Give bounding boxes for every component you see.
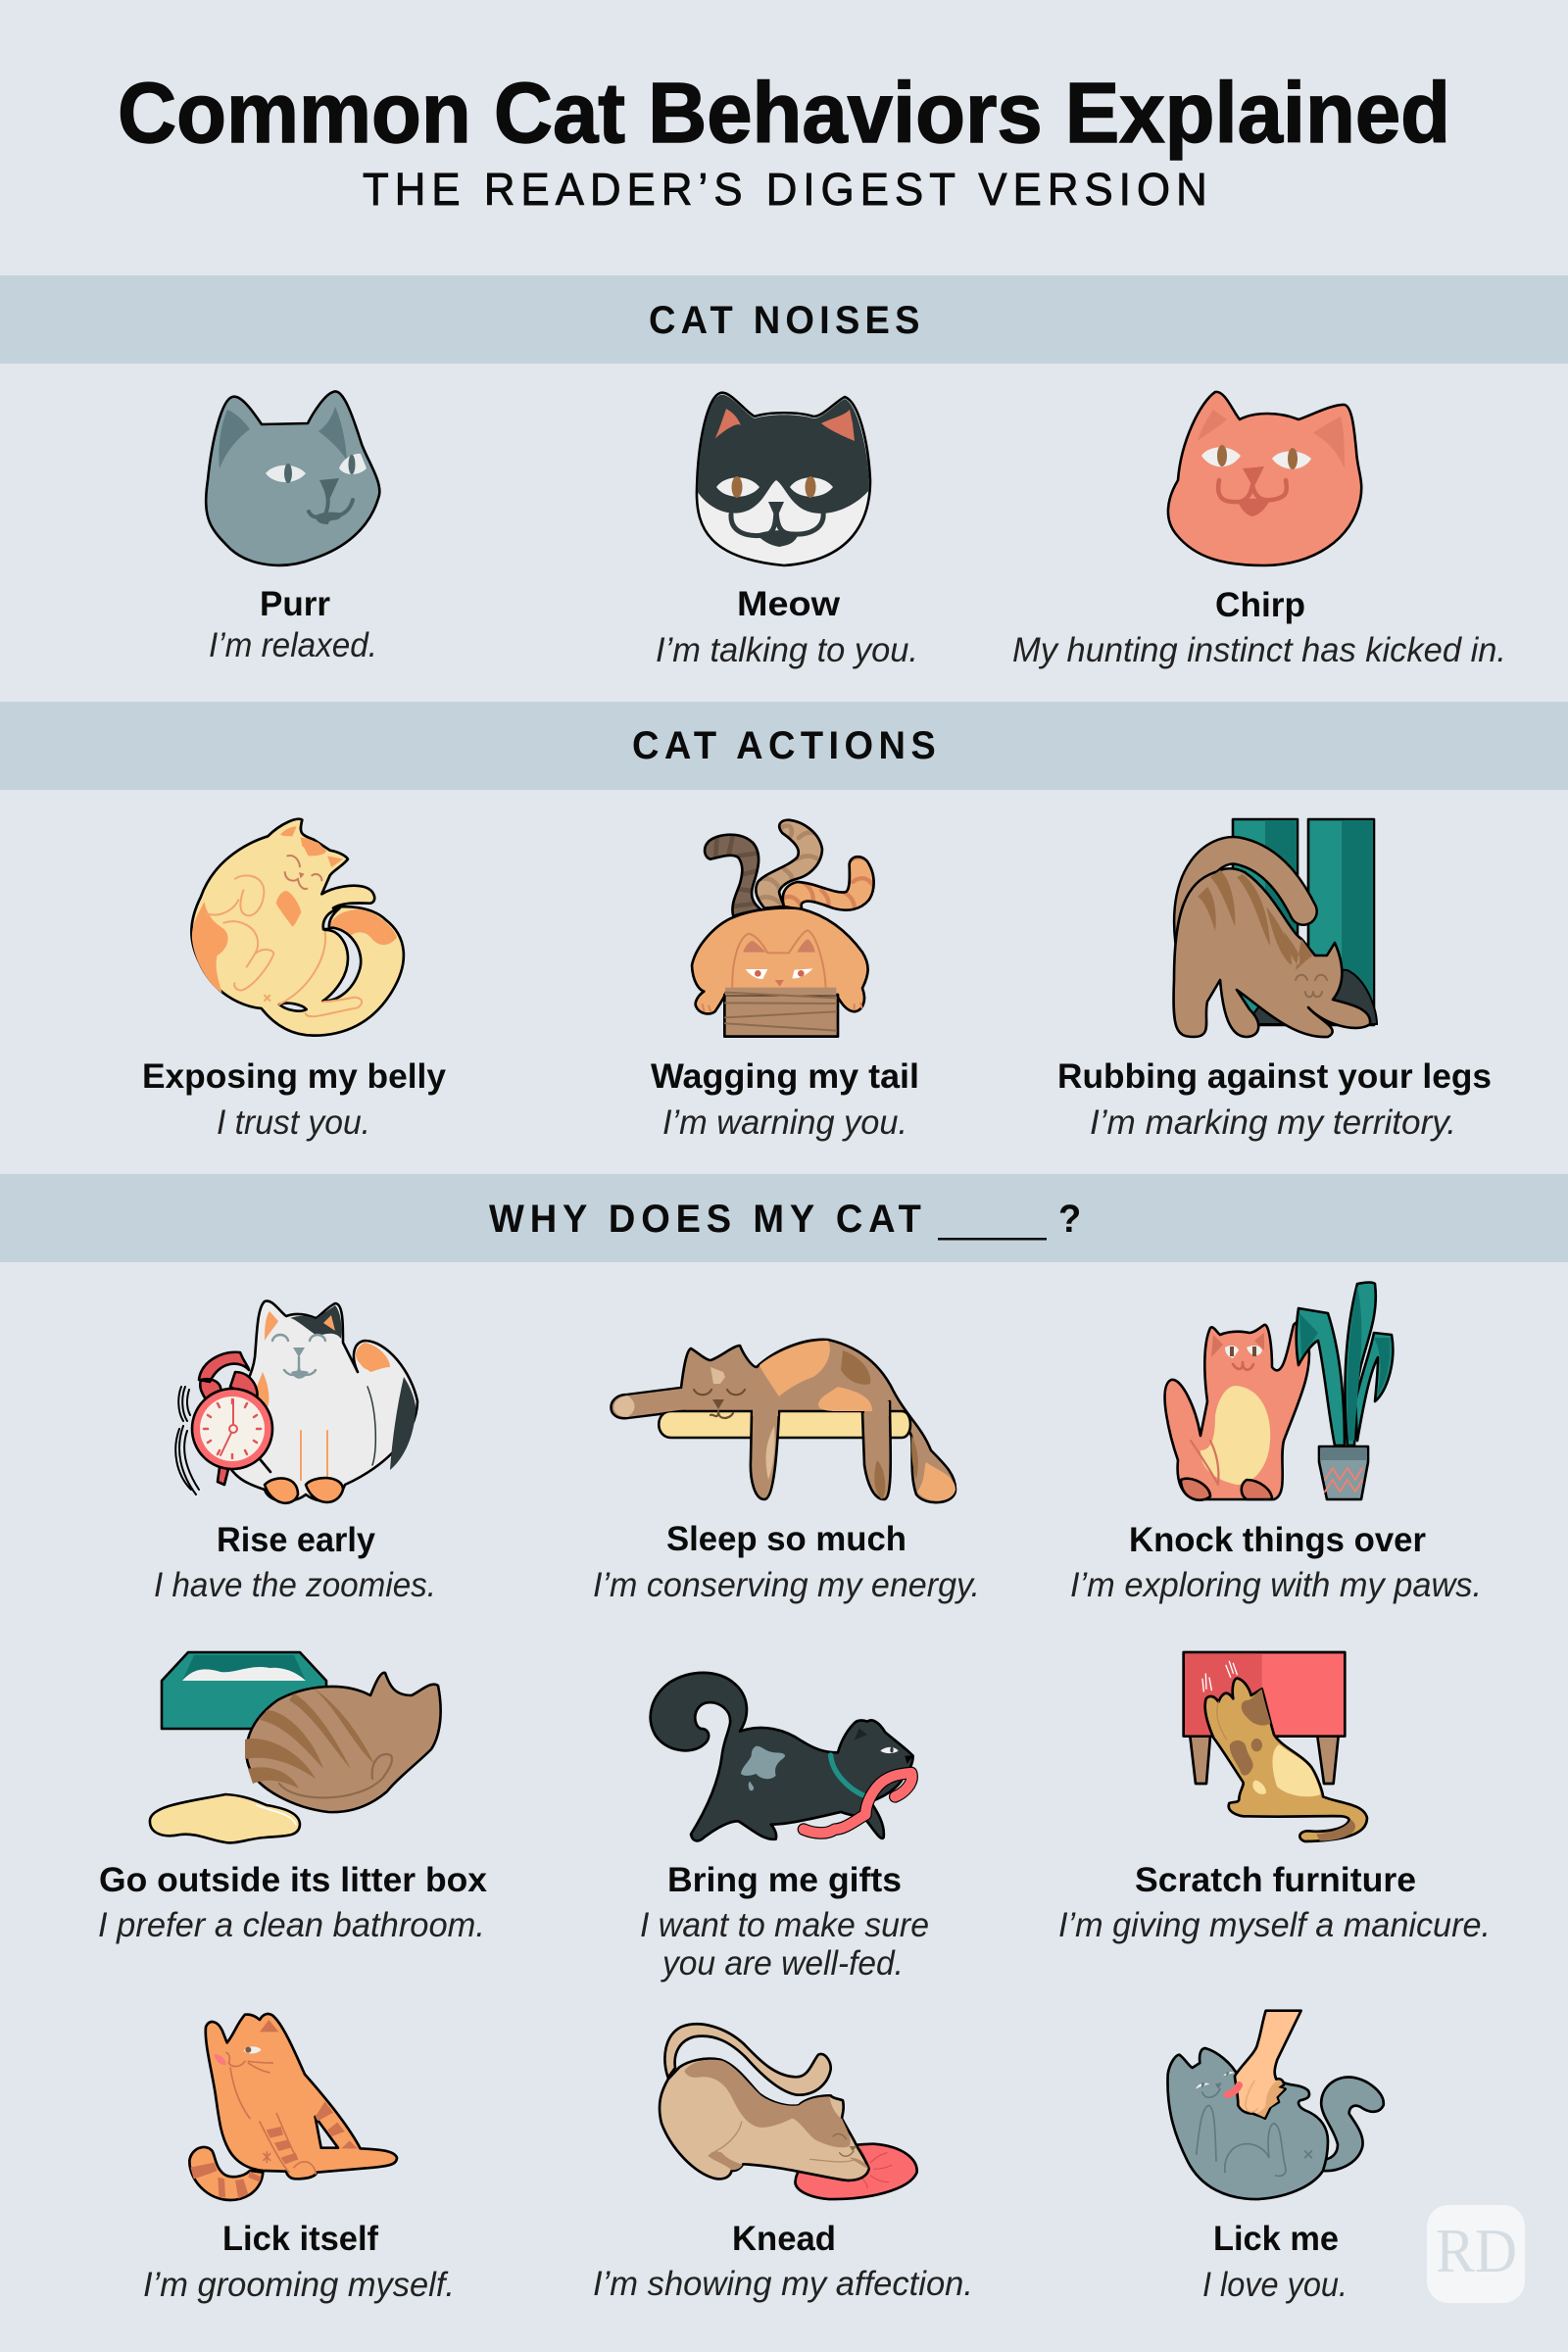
caption: I’m warning you. [662, 1103, 907, 1142]
item: wagging tail [651, 820, 919, 1142]
icon: cat sleeping on a log [612, 1340, 956, 1502]
icon: gray cat licking a hand [1167, 2011, 1384, 2199]
item: exposing belly [142, 819, 447, 1142]
icon: orange cat licking paw [189, 2014, 397, 2200]
logo: RD watermark: RD [1436, 2216, 1517, 2285]
item: scratch furniture [1058, 1652, 1491, 1944]
item: knock things over [1070, 1282, 1482, 1604]
section band: why does my cat: ? [1058, 1198, 1081, 1241]
label: Go outside its litter box [99, 1861, 488, 1899]
label: Bring me gifts [667, 1861, 902, 1899]
label: Purr [260, 585, 330, 623]
logo: RD watermark [1427, 2205, 1525, 2303]
label: Rise early [217, 1521, 376, 1559]
icon: coral cat face [1168, 392, 1361, 565]
item: meow [656, 393, 918, 669]
icon: cat kneading a red cushion [660, 2024, 917, 2199]
item: rise early [154, 1301, 436, 1604]
icon: cat rubbing two teal legs [1174, 819, 1377, 1037]
icon: litter box, cat and puddle [150, 1652, 441, 1842]
item: knead [593, 2024, 973, 2303]
icon: cat scratching a red table [1184, 1652, 1367, 1841]
heading: cat noises: CAT NOISES [649, 299, 919, 342]
icon: black cat carrying a toy [651, 1673, 913, 1840]
icon: cat and potted plant [1165, 1282, 1393, 1500]
section band: why does my cat [0, 1174, 1568, 1262]
caption: you are well-fed. [661, 1944, 904, 1983]
caption: I trust you. [217, 1103, 370, 1142]
title: Common Cat Behaviors Explained [118, 66, 1450, 161]
caption: I prefer a clean bathroom. [98, 1906, 485, 1944]
caption: I’m marking my territory. [1090, 1103, 1456, 1142]
label: Rubbing against your legs [1057, 1057, 1492, 1096]
item: purr [206, 391, 379, 664]
label: Chirp [1215, 586, 1305, 624]
caption: I want to make sure [640, 1906, 929, 1944]
section band: cat actions [0, 702, 1568, 790]
label: Scratch furniture [1135, 1861, 1416, 1899]
item: lick itself [143, 2014, 455, 2304]
subtitle: THE READER’S DIGEST VERSION [363, 164, 1207, 215]
label: Wagging my tail [651, 1057, 919, 1096]
caption: I have the zoomies. [154, 1566, 436, 1604]
caption: I’m conserving my energy. [593, 1566, 980, 1604]
caption: I’m relaxed. [209, 626, 377, 664]
label: Lick me [1213, 2220, 1339, 2258]
item: sleep so much [593, 1340, 980, 1604]
label: Sleep so much [666, 1520, 906, 1558]
item: lick me [1167, 2011, 1384, 2304]
icon: calico cat and alarm clock [175, 1301, 417, 1503]
icon: gray cat face [206, 391, 379, 565]
caption: I’m showing my affection. [593, 2265, 973, 2303]
caption: I’m talking to you. [656, 631, 918, 669]
label: Knead [732, 2220, 836, 2258]
item: outside litter box [98, 1652, 488, 1944]
caption: I’m exploring with my paws. [1070, 1566, 1482, 1604]
caption: My hunting instinct has kicked in. [1012, 631, 1506, 669]
item: bring me gifts [640, 1673, 929, 1983]
item: rubbing legs [1057, 819, 1492, 1142]
icon: tuxedo cat face [697, 393, 870, 565]
label: Lick itself [222, 2220, 378, 2258]
caption: I’m grooming myself. [143, 2266, 455, 2304]
section band: cat noises [0, 275, 1568, 364]
label: Knock things over [1129, 1521, 1426, 1559]
item: chirp [1012, 392, 1506, 669]
icon: cat in a box with three tails [692, 820, 875, 1037]
heading: cat actions: CAT ACTIONS [632, 724, 936, 767]
heading: why does my cat: WHY DOES MY CAT [489, 1198, 921, 1241]
label: Meow [737, 585, 841, 623]
label: Exposing my belly [142, 1057, 447, 1096]
caption [640, 1906, 929, 1983]
icon: cat on its back [191, 819, 404, 1036]
caption: I’m giving myself a manicure. [1058, 1906, 1491, 1944]
caption: I love you. [1202, 2266, 1348, 2304]
